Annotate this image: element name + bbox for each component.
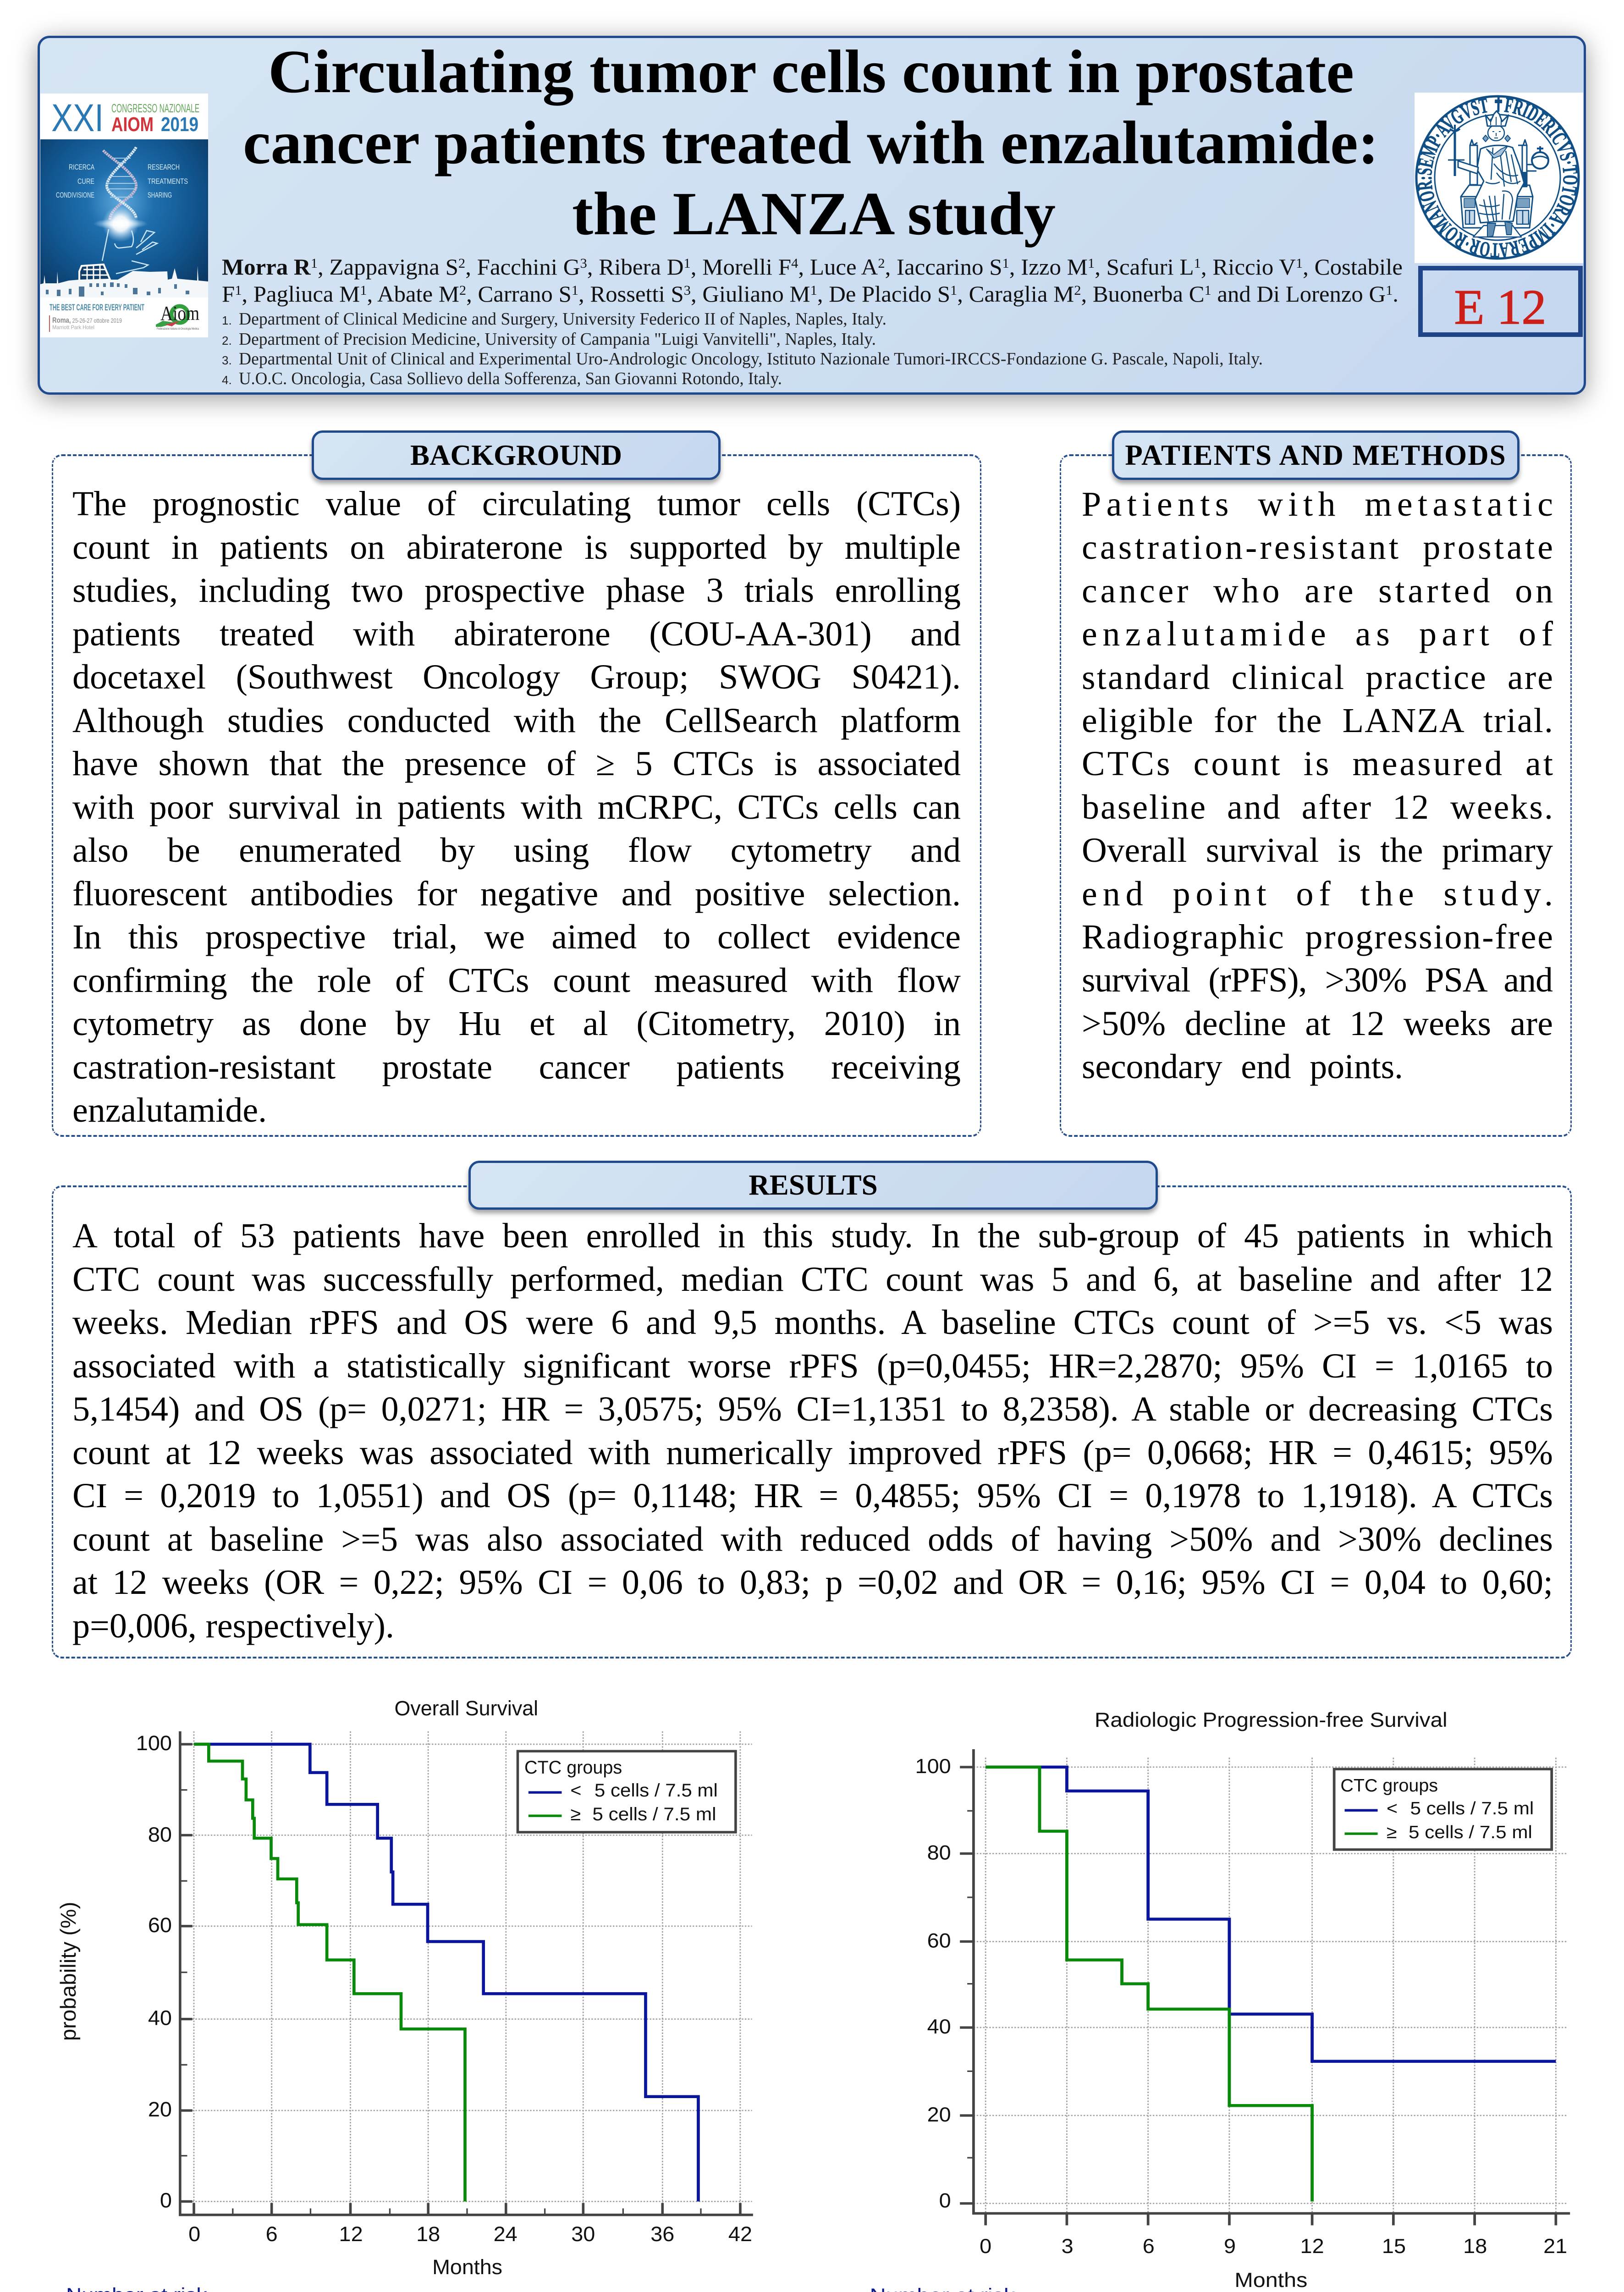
- authors: 1: [1002, 256, 1009, 271]
- heading: results: RESULTS: [749, 1169, 878, 1201]
- authors: 1: [1386, 283, 1393, 298]
- text: background body: have shown that the presence of ≥ 5 CTCs is associated: [72, 744, 961, 783]
- authors: , Carrano S: [466, 281, 572, 307]
- text: results body: count at 12 weeks was associated with numerically improved rPFS (p= 0,0668; HR = 0,4615; 95%: [72, 1433, 1553, 1471]
- conference poster: AIOM 2019: Roma, 25-26-27 ottobre 2019: [52, 316, 122, 325]
- text: results body: A total of 53 patients have been enrolled in this study. In the sub-group of 45 patients in which: [72, 1217, 1553, 1255]
- legend: [1334, 1769, 1552, 1850]
- legend: ≥: [570, 1803, 581, 1824]
- text: background body: confirming the role of CTCs count measured with flow: [72, 961, 961, 999]
- panel: background: [52, 430, 981, 1137]
- legend: CTC groups: [524, 1757, 622, 1778]
- legend: 5 cells / 7.5 ml: [1409, 1823, 1532, 1842]
- x axis labels: 15: [1382, 2235, 1406, 2258]
- authors: Morra R: [222, 254, 311, 280]
- text: patients and methods body: eligible for the LANZA trial.: [1082, 701, 1553, 740]
- authors: .: [1393, 281, 1398, 307]
- university seal: ✝FRIDERICVS·TOTORA·IMPERATOR·ROMANOR:SEMP·AVGVST: [1407, 87, 1586, 268]
- throne: [1461, 185, 1533, 228]
- authors: 3: [684, 283, 691, 298]
- authors: 1: [950, 283, 957, 298]
- x axis labels: [188, 2222, 752, 2246]
- x axis labels: 42: [728, 2222, 752, 2246]
- panel: results: [52, 1161, 1572, 1658]
- authors: , Pagliuca M: [242, 281, 360, 307]
- panel: patients and methods: [1060, 430, 1572, 1137]
- authors: , Costabile: [1303, 254, 1403, 280]
- text: patients and methods body: CTCs count is measured at: [1082, 744, 1553, 783]
- y axis labels: [136, 1731, 172, 2212]
- authors: 1: [1088, 256, 1095, 271]
- text: background body: patients treated with abiraterone (COU-AA-301) and: [72, 614, 961, 653]
- authors: 1: [1296, 256, 1303, 271]
- heading: patients and methods: [1112, 430, 1519, 480]
- affiliations: Department of Precision Medicine, University of Campania "Luigi Vanvitelli", Naples, Italy.: [239, 330, 876, 349]
- title: the LANZA study: [572, 180, 1056, 248]
- text: background body: docetaxel (Southwest Oncology Group; SWOG S0421).: [72, 658, 961, 696]
- authors: , Luce A: [798, 254, 878, 280]
- chart: radiologic progression-free survival: [802, 1673, 1624, 2292]
- title: cancer patients treated with enzalutamide:: [243, 109, 1379, 176]
- text: patients and methods body: Patients with metastatic: [1082, 485, 1553, 523]
- text: patients and methods body: standard clinical practice are: [1082, 658, 1553, 697]
- authors: F: [222, 281, 235, 307]
- authors: 2: [1074, 283, 1081, 298]
- text: background body: castration-resistant prostate cancer patients receiving: [72, 1048, 961, 1086]
- y axis labels: [915, 1755, 951, 2212]
- heading: results: [468, 1161, 1158, 1210]
- y axis labels: 100: [915, 1755, 951, 1778]
- x axis labels: 6: [266, 2222, 278, 2246]
- x axis labels: 18: [1463, 2235, 1487, 2258]
- text: background body: also be enumerated by using flow cytometry and: [72, 831, 961, 870]
- authors: , Caraglia M: [957, 281, 1074, 307]
- authors: 3: [580, 256, 587, 271]
- text: background body: enzalutamide.: [72, 1091, 267, 1129]
- y axis title: probability (%): [56, 1902, 80, 2041]
- legend: [517, 1751, 736, 1832]
- text: patients and methods body: survival (rPFS), >30% PSA and: [1082, 961, 1553, 999]
- text: patients and methods body: end point of the study.: [1082, 875, 1553, 913]
- text: results body: [72, 1214, 1553, 1647]
- authors: 1: [360, 283, 367, 298]
- text: results body: count at baseline >=5 was also associated with reduced odds of having >50% and >30% declines: [72, 1520, 1553, 1559]
- authors: 1: [1194, 256, 1201, 271]
- authors: , Iaccarino S: [885, 254, 1002, 280]
- authors: 1: [235, 283, 242, 298]
- x axis labels: 0: [980, 2235, 991, 2258]
- x axis labels: 18: [416, 2222, 440, 2246]
- heading: background: [312, 430, 721, 480]
- text: patients and methods body: enzalutamide as part of: [1082, 615, 1553, 653]
- x axis title: Months: [1234, 2269, 1307, 2292]
- text: background body: Although studies conducted with the CellSearch platform: [72, 701, 961, 740]
- authors: 1: [311, 256, 318, 271]
- text: patients and methods body: baseline and after 12 weeks.: [1082, 788, 1553, 826]
- affiliations: Department of Clinical Medicine and Surgery, University Federico II of Naples, Naples, Italy.: [239, 309, 886, 329]
- text: patients and methods body: Overall survival is the primary: [1082, 831, 1553, 870]
- y axis labels: 60: [148, 1913, 172, 1937]
- legend: 5 cells / 7.5 ml: [1410, 1799, 1534, 1818]
- y axis labels: 40: [148, 2006, 172, 2029]
- poster code box: E 12: E 12: [1454, 280, 1546, 335]
- y axis labels: 40: [927, 2015, 951, 2038]
- conference poster: AIOM 2019: Marriott Park Hotel: [52, 324, 94, 331]
- head and crown: [1488, 125, 1504, 141]
- x axis labels: 9: [1224, 2235, 1236, 2258]
- authors: 1: [810, 283, 817, 298]
- authors: , Zappavigna S: [318, 254, 458, 280]
- authors: , Izzo M: [1009, 254, 1088, 280]
- text: results body: associated with a statistically significant worse rPFS (p=0,0455; HR=2,2870; 95% CI = 1,0165 to: [72, 1347, 1553, 1385]
- conference poster: AIOM 2019: THE BEST CARE FOR EVERY PATIENT: [50, 303, 144, 313]
- x axis labels: 30: [571, 2222, 595, 2246]
- text: results body: CTC count was successfully performed, median CTC count was 5 and 6, at baseline and after 12: [72, 1260, 1553, 1298]
- authors: 1: [1205, 283, 1211, 298]
- text: background body: cytometry as done by Hu et al (Citometry, 2010) in: [72, 1004, 961, 1043]
- x axis labels: 36: [650, 2222, 674, 2246]
- conference poster: AIOM 2019: 2019: [161, 113, 198, 136]
- text: background body: studies, including two prospective phase 3 trials enrolling: [72, 571, 961, 610]
- text: background body: count in patients on abiraterone is supported by multiple: [72, 528, 961, 567]
- text: results body: 5,1454) and OS (p= 0,0271; HR = 3,0575; 95% CI=1,1351 to 8,2358). A stable or decreasing CTCs: [72, 1390, 1553, 1428]
- authors: 4: [791, 256, 798, 271]
- text: patients and methods body: cancer who are started on: [1082, 572, 1553, 610]
- text: patients and methods body: secondary end points.: [1082, 1047, 1403, 1086]
- legend: ≥: [1387, 1823, 1397, 1842]
- affiliations: U.O.C. Oncologia, Casa Sollievo della Sofferenza, San Giovanni Rotondo, Italy.: [239, 369, 782, 388]
- conference poster: AIOM 2019: CURE: [77, 177, 94, 186]
- text: background body: In this prospective trial, we aimed to collect evidence: [72, 918, 961, 956]
- conference poster: AIOM 2019: Aiom: [160, 302, 199, 325]
- text: background body: with poor survival in patients with mCRPC, CTCs cells can: [72, 788, 961, 826]
- text: results body: CI = 0,2019 to 1,0551) and OS (p= 0,1148; HR = 0,4855; 95% CI = 0,1978 to 1,1918). A CTCs: [72, 1477, 1553, 1515]
- y axis labels: 100: [136, 1731, 172, 1755]
- curve: less than 5 cells: [194, 1744, 698, 2201]
- chart title: Radiologic Progression-free Survival: [1095, 1708, 1448, 1731]
- y axis labels: 20: [927, 2103, 951, 2126]
- x axis title: Months: [432, 2255, 502, 2279]
- conference poster: AIOM 2019: CONDIVISIONE: [56, 191, 94, 199]
- header banner: [38, 36, 1586, 395]
- legend: 5 cells / 7.5 ml: [592, 1803, 716, 1824]
- authors: , Ribera D: [587, 254, 684, 280]
- x axis labels: 21: [1543, 2235, 1567, 2258]
- heading: background: BACKGROUND: [410, 439, 622, 471]
- curve: less than 5 cells: [985, 1767, 1556, 2061]
- authors: , Riccio V: [1201, 254, 1296, 280]
- affiliations: 4.: [222, 373, 232, 387]
- authors: , Abate M: [367, 281, 459, 307]
- y axis labels: 80: [927, 1841, 951, 1864]
- affiliations: 1.: [222, 314, 232, 327]
- legend: 5 cells / 7.5 ml: [595, 1780, 718, 1801]
- title: Circulating tumor cells count in prostate: [268, 38, 1354, 106]
- authors: [222, 254, 1403, 307]
- legend: CTC groups: [1340, 1776, 1438, 1796]
- curve: 5 or more cells: [985, 1767, 1312, 2201]
- x axis labels: 12: [1300, 2235, 1324, 2258]
- conference poster: AIOM 2019: [40, 94, 208, 337]
- affiliations: 2.: [222, 334, 232, 347]
- heading: patients and methods: PATIENTS AND METHODS: [1125, 439, 1507, 471]
- conference poster: AIOM 2019: SHARING: [148, 191, 172, 199]
- authors: 2: [459, 283, 466, 298]
- text: patients and methods body: castration-resistant prostate: [1082, 528, 1553, 567]
- authors: , Buonerba C: [1081, 281, 1205, 307]
- authors: and Di Lorenzo G: [1211, 281, 1386, 307]
- authors: , Giuliano M: [691, 281, 810, 307]
- conference poster: AIOM 2019: CONGRESSO NAZIONALE: [111, 101, 199, 115]
- y axis labels: 20: [148, 2098, 172, 2121]
- x axis labels: 12: [339, 2222, 363, 2246]
- y axis labels: 60: [927, 1929, 951, 1952]
- x axis labels: [980, 2235, 1567, 2258]
- text: patients and methods body: [1060, 480, 1572, 1131]
- conference poster: AIOM 2019: TREATMENTS: [148, 177, 188, 186]
- y axis labels: 0: [160, 2188, 172, 2212]
- text: background body: fluorescent antibodies for negative and positive selection.: [72, 875, 961, 913]
- x axis labels: 3: [1062, 2235, 1073, 2258]
- axes: [180, 1731, 753, 2215]
- authors: 2: [458, 256, 465, 271]
- authors: 2: [878, 256, 885, 271]
- affiliations: 3.: [222, 353, 232, 367]
- conference poster: AIOM 2019: XXI: [51, 96, 104, 139]
- robe: [1475, 145, 1524, 223]
- affiliations: [222, 309, 1263, 388]
- curve: 5 or more cells: [194, 1744, 465, 2201]
- x axis labels: 0: [188, 2222, 200, 2246]
- text: background body: The prognostic value of circulating tumor cells (CTCs): [72, 485, 961, 523]
- conference poster: AIOM 2019: RICERCA: [69, 163, 94, 171]
- authors: 1: [684, 256, 691, 271]
- text: results body: weeks. Median rPFS and OS were 6 and 9,5 months. A baseline CTCs count of >=5 vs. <5 was: [72, 1303, 1553, 1342]
- legend: <: [570, 1780, 582, 1801]
- y axis labels: 0: [939, 2189, 951, 2212]
- text: patients and methods body: >50% decline at 12 weeks are: [1082, 1004, 1553, 1043]
- authors: , Facchini G: [465, 254, 580, 280]
- title: [243, 38, 1379, 248]
- text: patients and methods body: Radiographic progression-free: [1082, 918, 1553, 956]
- x axis labels: 24: [494, 2222, 517, 2246]
- y axis labels: 80: [148, 1823, 172, 1846]
- feet: [1473, 226, 1521, 237]
- conference poster: AIOM 2019: AIOM: [111, 113, 154, 136]
- text: results body: p=0,006, respectively).: [72, 1606, 394, 1645]
- conference poster: AIOM 2019: RESEARCH: [148, 163, 180, 171]
- authors: , Rossetti S: [578, 281, 684, 307]
- legend: <: [1387, 1799, 1398, 1818]
- chart: overall survival: [0, 1673, 802, 2292]
- affiliations: Departmental Unit of Clinical and Experimental Uro-Andrologic Oncology, Istituto Nazionale Tumori-IRCCS-Fondazione G. Pascale, Napoli, Italy.: [239, 349, 1263, 369]
- sceptre, arm and orb: [1454, 132, 1456, 176]
- authors: , De Placido S: [817, 281, 950, 307]
- poster code box: E 12: [1420, 268, 1580, 335]
- authors: 1: [572, 283, 578, 298]
- text: background body: [72, 482, 961, 1132]
- axes: [960, 1749, 1570, 2226]
- x axis labels: 6: [1143, 2235, 1155, 2258]
- authors: , Scafuri L: [1095, 254, 1194, 280]
- authors: , Morelli F: [691, 254, 791, 280]
- chart title: Overall Survival: [394, 1697, 538, 1720]
- conference poster: AIOM 2019: Federazione Italiana di Oncologia Medica: [157, 328, 199, 331]
- text: results body: at 12 weeks (OR = 0,22; 95% CI = 0,06 to 0,83; p =0,02 and OR = 0,16; 95% CI = 0,04 to 0,60;: [72, 1563, 1553, 1602]
